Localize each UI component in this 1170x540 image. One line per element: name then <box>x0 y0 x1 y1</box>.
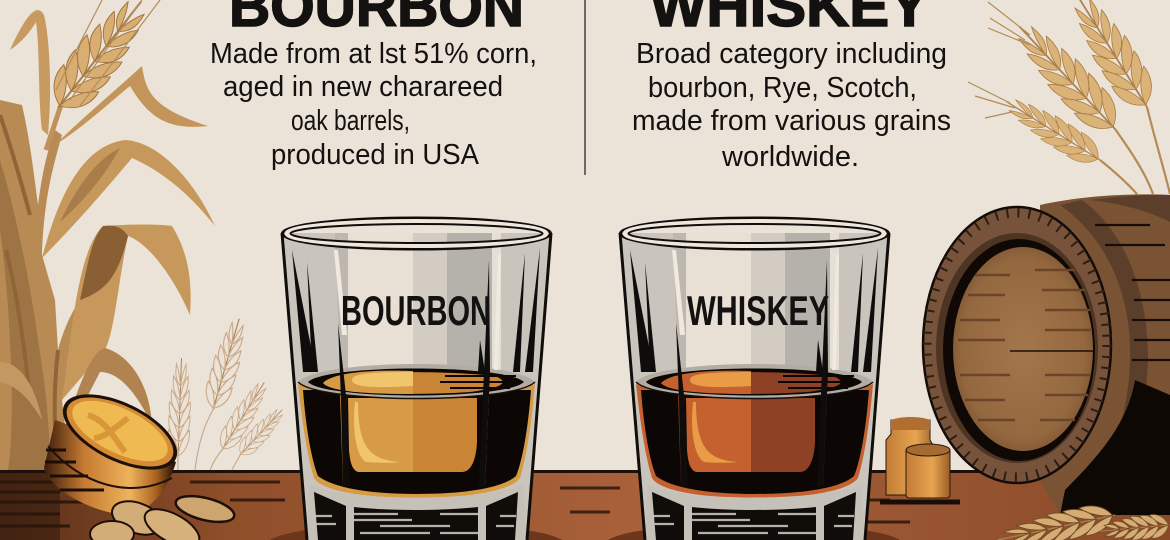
whiskey description: worldwide. <box>721 141 859 173</box>
corn plant <box>0 0 215 470</box>
bourbon glass <box>282 218 551 540</box>
corn stalk <box>0 100 108 470</box>
barrel <box>923 194 1170 515</box>
glass label: bourbon: BOURBON <box>341 287 491 334</box>
tin with golden lid <box>44 379 188 516</box>
whiskey description <box>632 38 951 173</box>
bourbon description: produced in USA <box>271 139 480 171</box>
small wheat sprigs <box>167 315 289 470</box>
divider <box>584 0 586 175</box>
far left leaf <box>0 362 42 420</box>
bottom right wheat on table <box>995 501 1170 540</box>
middle leaf <box>42 140 215 258</box>
small jars <box>880 417 960 502</box>
corn chips <box>90 491 237 540</box>
barrel head rim <box>923 207 1111 483</box>
whiskey description: made from various grains <box>632 105 951 137</box>
whiskey description: bourbon, Rye, Scotch, <box>648 72 917 104</box>
bourbon description <box>210 38 537 171</box>
whiskey description: Broad category including <box>636 38 947 70</box>
right wheat <box>968 0 1170 194</box>
whiskey glass <box>620 218 889 540</box>
barrel body <box>1040 194 1170 515</box>
glass label: whiskey: WHISKEY <box>687 287 829 334</box>
lower leaf <box>60 348 152 445</box>
top wheat ear <box>46 102 62 150</box>
bourbon description: Made from at lst 51% corn, <box>210 38 537 70</box>
upper leaf <box>55 66 208 145</box>
glass shadows <box>266 523 904 540</box>
table <box>0 470 1170 540</box>
bourbon description: oak barrels, <box>291 105 410 137</box>
bourbon description: aged in new charareed <box>223 71 503 103</box>
barrel head <box>943 239 1095 461</box>
large leaf <box>62 224 191 400</box>
curled top leaf <box>10 10 50 135</box>
